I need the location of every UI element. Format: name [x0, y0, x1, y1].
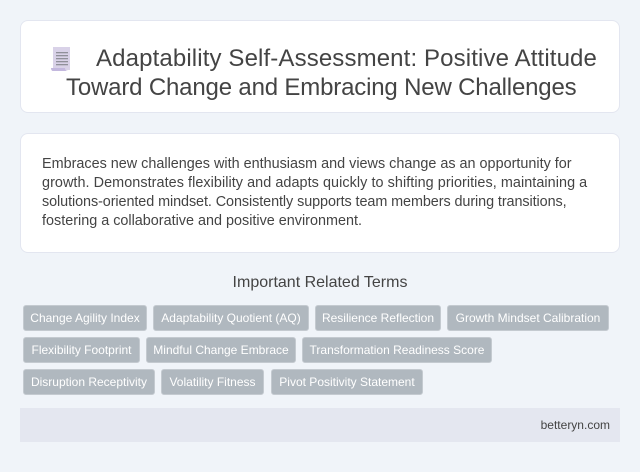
tag: Disruption Receptivity	[31, 375, 147, 389]
heading: title	[66, 45, 597, 101]
tag	[271, 369, 423, 395]
tag: Growth Mindset Calibration	[456, 311, 600, 325]
tag	[302, 337, 492, 363]
panel: description card	[20, 133, 620, 253]
tag: Transformation Readiness Score	[310, 343, 484, 357]
tag	[153, 305, 309, 331]
footer bar	[20, 408, 620, 442]
heading: related terms: Important Related Terms	[233, 274, 407, 291]
tag: Flexibility Footprint	[31, 343, 132, 357]
footer: source: betteryn.com	[541, 418, 610, 432]
tags: related terms	[23, 305, 609, 395]
text block: description: growth. Demonstrates flexibility and adapts quickly to shifting priorities, maintaining a	[42, 175, 587, 191]
icon: document scroll	[51, 47, 70, 71]
heading: title: Toward Change and Embracing New Challenges	[66, 74, 576, 101]
tag: Adaptability Quotient (AQ)	[161, 311, 301, 325]
tag: Pivot Positivity Statement	[279, 375, 415, 389]
tag	[23, 369, 155, 395]
text block: description: fostering a collaborative and positive environment.	[42, 213, 362, 229]
tag	[23, 305, 147, 331]
panel: title card	[20, 20, 620, 113]
tag: Mindful Change Embrace	[153, 343, 289, 357]
tag	[23, 337, 140, 363]
tag: Volatility Fitness	[169, 375, 256, 389]
tag: Resilience Reflection	[322, 311, 434, 325]
tag	[146, 337, 296, 363]
text block: description	[42, 156, 588, 229]
tag	[161, 369, 264, 395]
tag	[447, 305, 609, 331]
text block: description: Embraces new challenges with enthusiasm and views change as an opportunity for	[42, 156, 572, 172]
text block: description: solutions-oriented mindset. Consistently supports team members during transitions,	[42, 194, 567, 210]
tag: Change Agility Index	[30, 311, 140, 325]
tag	[315, 305, 441, 331]
heading: title: Adaptability Self-Assessment: Positive Attitude	[96, 45, 597, 72]
